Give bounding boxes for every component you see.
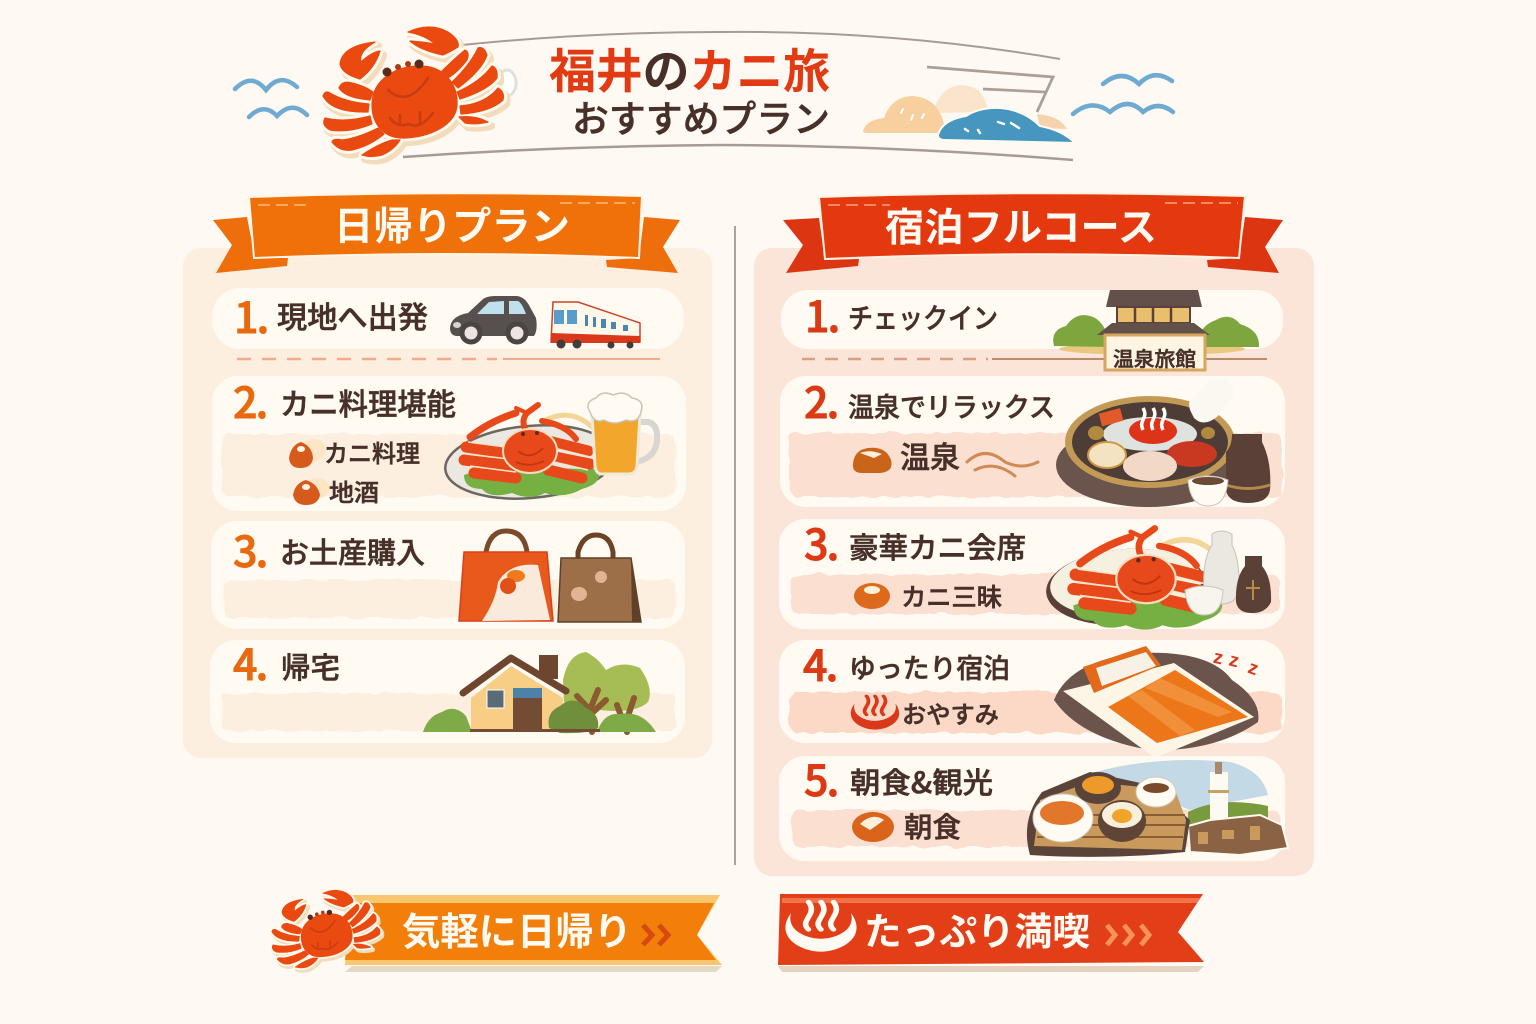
step 4: おやすみ [902,695,999,730]
icon: onsen mark [851,696,899,730]
step 2: 温泉 [900,433,960,477]
icon: onsen mark [785,902,857,952]
step 4: 4. [803,632,836,694]
step 4: ゆったり宿泊 [849,647,1010,686]
illustration: meal tray with sake [1056,379,1270,507]
icon: chevrons [643,925,668,945]
step 5: 朝食 [904,806,961,846]
icon: train [551,302,640,348]
step 4 [210,631,685,743]
panel: day trip plan [183,193,712,758]
icon: chevrons [1107,925,1149,945]
title line 2: おすすめプラン [572,89,830,143]
icon: orange shopping bag [459,531,553,621]
step 2: カニ料理堪能 [280,380,456,424]
step 3 [211,518,685,629]
route line [802,358,1267,360]
footer ribbon: day trip [272,890,722,972]
icon: car [450,296,537,344]
title line 1: 福井のカニ旅 [549,33,830,102]
step 3: 3. [233,518,266,580]
footer ribbon: day trip: 気軽に日帰り [402,901,632,956]
divider [734,226,736,865]
icon: steam cloud [1189,379,1234,423]
illustration: crab plate [442,405,618,505]
icon: crab [272,890,382,970]
step 5: 5. [804,747,837,809]
illustration: house and trees [423,652,656,733]
icon: crab dish mound [289,439,326,468]
icon: breakfast bun [852,812,894,842]
banner: 日帰りプラン [213,193,680,273]
icon: crab mascot [323,27,516,160]
step 3 [779,511,1285,630]
icon: sleeping zzz [1211,647,1261,680]
step 2 [212,369,686,511]
icon: mountains and waves [863,67,1075,143]
footer ribbon: overnight [778,894,1204,972]
banner: 宿泊フルコース [783,193,1283,273]
step 4: 4. [233,631,266,693]
icon: seagulls left [235,80,307,117]
illustration: ryokan inn: 温泉旅館 [1113,343,1196,372]
illustration: beer mug [588,393,657,474]
step 3: 豪華カニ会席 [849,525,1026,567]
step 1: 現地へ出発 [277,293,428,337]
step 1: 1. [234,284,267,346]
step 5: 朝食&観光 [850,760,993,802]
illustration: breakfast and lighthouse [1027,760,1288,857]
icon: onsen stone [853,448,892,473]
step 3: お土産購入 [280,530,425,572]
illustration: crab kaiseki plate and sake [1044,528,1271,630]
step 1: 1. [805,283,838,345]
icon: brown shopping bag [558,535,641,622]
step 5 [779,747,1288,861]
step 4: 帰宅 [281,645,340,687]
illustration: ryokan inn [1053,290,1259,372]
icon: steam waves [967,454,1038,476]
route line [237,358,660,360]
footer ribbon: overnight: たっぷり満喫 [864,901,1090,956]
icon: seagulls right [1073,75,1173,114]
step 2: 地酒 [329,473,379,508]
step 2: 2. [233,369,266,431]
panel: overnight full course [754,193,1314,876]
step 1: チェックイン [848,297,998,337]
step 2: カニ料理 [324,434,420,469]
step 1 [781,283,1283,349]
step 2 [780,369,1285,507]
icon: crab dish bun [854,583,890,609]
step 2: 温泉でリラックス [848,386,1055,425]
banner: 日帰りプラン: 日帰りプラン [334,196,570,252]
header title group [235,27,1173,160]
banner: 宿泊フルコース: 宿泊フルコース [885,197,1157,253]
icon: sleeping zzz: z [1211,647,1225,669]
step 3: 3. [804,511,837,573]
step 2: 2. [804,369,837,431]
illustration: futon [1054,646,1261,758]
icon: sleeping zzz: z [1245,657,1261,680]
icon: sake mound [293,478,330,505]
icon: sleeping zzz: z [1227,650,1241,672]
step 3: カニ三昧 [901,578,1002,614]
step 4 [779,632,1285,758]
step 1 [212,284,684,349]
